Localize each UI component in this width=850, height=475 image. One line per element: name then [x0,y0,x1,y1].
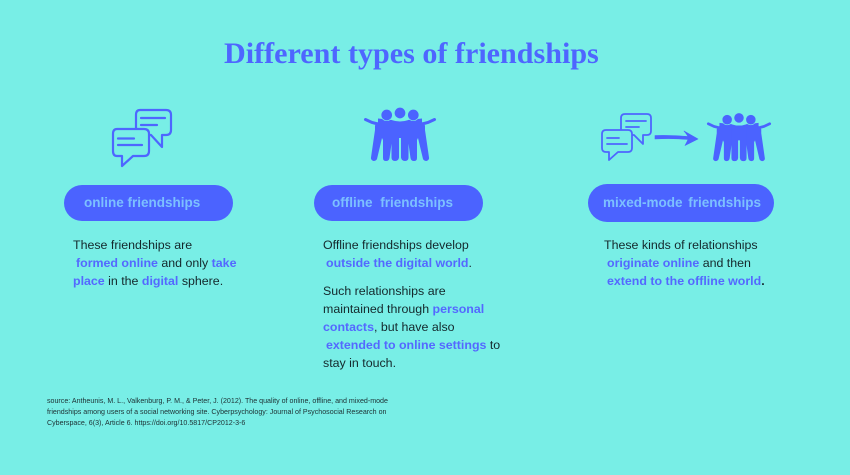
text block: mixed-mode: extend to the offline world. [607,274,765,288]
icon: mixed-mode chat to friends [601,113,772,162]
text block: online: place in the digital sphere. [73,274,223,288]
text block: mixed-mode: These kinds of relationships [604,238,758,252]
text block: offline details: contacts, but have also [323,320,455,334]
text block: offline details: extended to online settings to [326,338,500,352]
group of friends [708,113,770,161]
title: Different types of friendships [224,36,599,70]
text block: offline details [323,284,500,370]
arrow [655,131,698,146]
label pill: offline friendships: offline friendships [332,195,453,210]
text block: offline intro: outside the digital world. [326,256,472,270]
label pill: online friendships: online friendships [84,195,200,210]
chat bubbles [602,114,651,160]
text block: mixed-mode [604,238,765,288]
text block: offline details: Such relationships are [323,284,446,298]
source citation [47,397,388,427]
icon: online chat bubbles [112,108,172,168]
text block: offline details: stay in touch. [323,356,396,370]
text block: offline intro [323,238,472,270]
icon: offline group of friends [364,108,436,161]
label pill: online friendships [64,185,233,221]
text block: mixed-mode: originate online and then [607,256,751,270]
source citation: source: Antheunis, M. L., Valkenburg, P. M., & Peter, J. (2012). The quality of online, offline, and mixed-mode [47,397,388,405]
label pill: mixed-mode friendships: mixed-mode friendships [603,195,761,210]
text block: offline details: maintained through personal [323,302,484,316]
label pill: offline friendships [314,185,483,221]
text block: offline intro: Offline friendships develop [323,238,469,252]
source citation: friendships among users of a social networking site. Cyberpsychology: Journal of Psychosocial Research on [47,408,386,416]
text block: online: formed online and only take [76,256,236,270]
label pill: mixed-mode friendships [588,184,774,222]
text block: online [73,238,236,288]
text block: online: These friendships are [73,238,192,252]
source citation: Cyberspace, 6(3), Article 6. https://doi.org/10.5817/CP2012-3-6 [47,419,245,427]
